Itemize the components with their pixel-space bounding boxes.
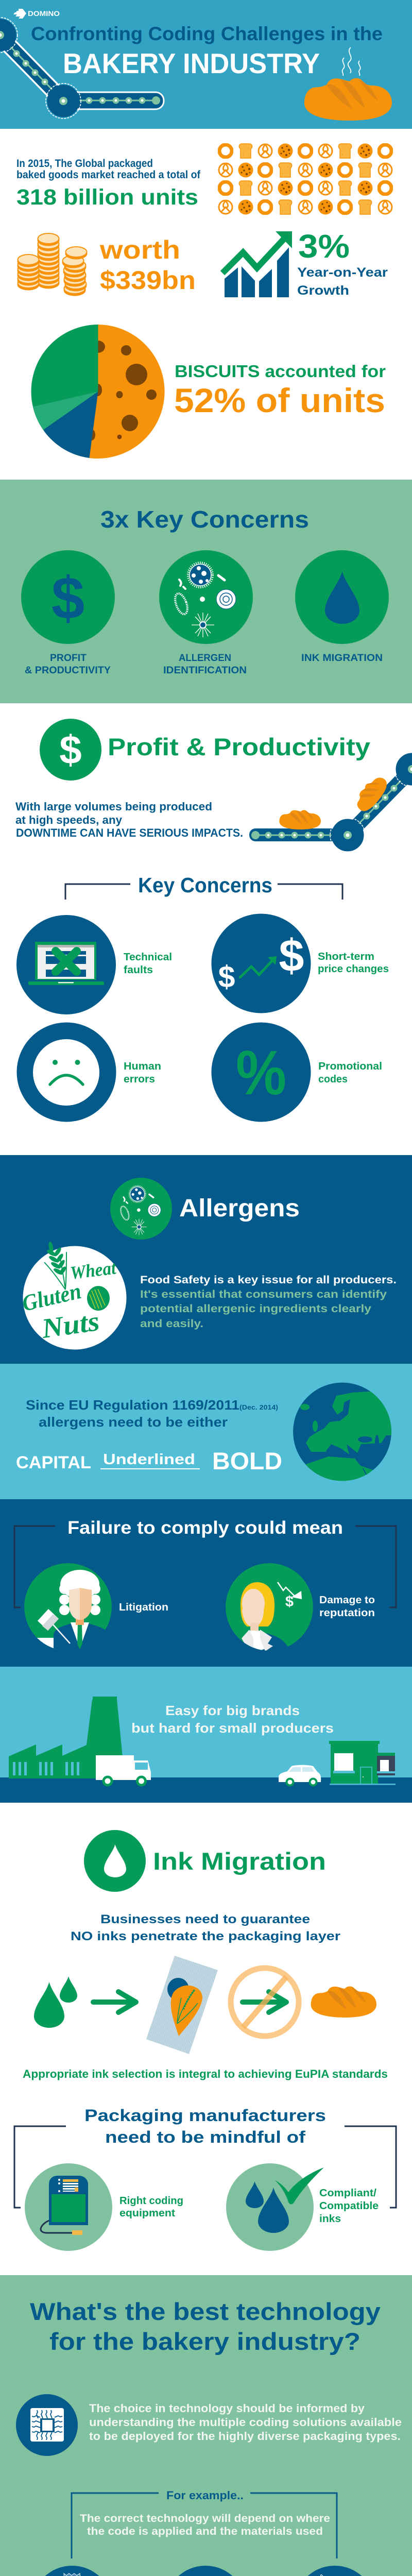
heading xyxy=(30,2298,381,2355)
heading: Ink Migration xyxy=(153,1848,326,1875)
icon: prohibited arrow xyxy=(231,1968,299,2036)
stat: 318 billion units: 318 billion units xyxy=(16,185,198,210)
label: promotional codes: codes xyxy=(318,1074,348,1085)
label: year on year growth: Year-on-Year xyxy=(297,265,388,280)
panel: EU regulation xyxy=(0,1364,412,1499)
heading: Profit & Productivity xyxy=(108,733,370,760)
icon: human errors face xyxy=(16,1022,116,1122)
icon: bread xyxy=(311,1987,376,2018)
label: allergen identification: ALLERGEN xyxy=(179,653,231,664)
label: price changes: price changes xyxy=(318,963,389,975)
label: profit and productivity xyxy=(25,653,111,676)
panel: failure to comply xyxy=(0,1499,412,1667)
panel: profit and productivity xyxy=(15,719,412,1122)
text: easy for big brands: Easy for big brands xyxy=(165,1703,300,1718)
text: bold: BOLD xyxy=(212,1447,282,1475)
label: right coding equipment: Right coding xyxy=(119,2195,183,2207)
chart: growth xyxy=(222,231,292,297)
icon: businesswoman: $ xyxy=(285,1594,294,1610)
icon: wheat gluten nuts: Nuts xyxy=(39,1306,101,1344)
label: human errors: errors xyxy=(124,1074,155,1085)
icon: snack bar box xyxy=(165,2566,246,2576)
text: guarantee xyxy=(71,1912,341,1943)
text: correct technology xyxy=(80,2513,330,2537)
text: downtime xyxy=(15,800,243,839)
icon: ink drop badge xyxy=(84,1830,146,1892)
text: food safety: and easily. xyxy=(140,1317,203,1330)
icon: ink drops xyxy=(34,1976,77,2028)
panel: best technology xyxy=(0,2275,412,2576)
road xyxy=(0,1777,412,1803)
decorative bracket with heading: For example.. xyxy=(166,2489,244,2502)
text: downtime: at high speeds, any xyxy=(15,814,123,826)
label: human errors: Human xyxy=(124,1061,161,1072)
decorative bracket with heading: Packaging manufacturers xyxy=(84,2106,326,2125)
text: food safety: Food Safety is a key issue for all producers. xyxy=(140,1274,397,1286)
heading: What's the best technology xyxy=(30,2298,381,2325)
text: food safety xyxy=(140,1274,397,1330)
stat: $339bn: $339bn xyxy=(100,266,196,295)
text: biscuits accounted for: BISCUITS accounted for xyxy=(175,362,386,381)
icon: factory xyxy=(9,1697,126,1778)
decorative bracket with heading xyxy=(14,1518,396,1607)
panel: header xyxy=(0,0,412,129)
text: food safety: It's essential that consumers can identify xyxy=(140,1288,387,1300)
panel: big brands and small producers xyxy=(0,1667,412,1803)
decorative bracket with heading xyxy=(72,2489,337,2558)
icon: allergens badge xyxy=(110,1178,172,1240)
text: capital: CAPITAL xyxy=(16,1453,91,1472)
title line 2: BAKERY INDUSTRY xyxy=(63,47,320,79)
heading: key concerns with bracket: Key Concerns xyxy=(138,873,272,897)
heading: Allergens xyxy=(179,1195,300,1222)
label: price changes xyxy=(318,951,389,975)
label: compliant inks: Compliant/ xyxy=(319,2188,376,2199)
icon: ink drop xyxy=(295,550,389,644)
label: technical faults: faults xyxy=(124,964,153,976)
label: profit and productivity: PROFIT xyxy=(50,653,87,664)
label: damage to reputation: Damage to xyxy=(319,1595,375,1606)
icon: price changes: $ xyxy=(279,930,304,981)
label: promotional codes xyxy=(318,1061,382,1085)
icon: percent xyxy=(211,1022,311,1122)
text: underlined: Underlined xyxy=(103,1451,195,1468)
icon: technical faults laptop xyxy=(16,915,116,1014)
stat: 52% of units: 52% of units xyxy=(174,381,385,419)
icon: bread tag xyxy=(294,2566,375,2576)
text: regulation xyxy=(26,1397,278,1430)
icon: conveyor belt xyxy=(0,18,164,118)
icon: wheat gluten nuts: Gluten xyxy=(20,1278,83,1316)
stat: worth: worth xyxy=(99,235,180,264)
icon: price changes: $ xyxy=(218,960,235,994)
panel: 3x key concerns xyxy=(0,480,412,703)
label: profit and productivity: & PRODUCTIVITY xyxy=(25,665,111,676)
text: guarantee: NO inks penetrate the packaging layer xyxy=(71,1929,341,1943)
label: technical faults xyxy=(124,952,172,976)
title line 1: Confronting Coding Challenges in the xyxy=(31,23,383,44)
decorative bracket with heading: Failure to comply could mean xyxy=(67,1518,343,1538)
label: litigation: Litigation xyxy=(119,1602,168,1613)
icon: dollar xyxy=(21,550,115,644)
text: market intro: In 2015, The Global packaged xyxy=(16,158,153,170)
icon: dollar: $ xyxy=(52,565,84,632)
icon: bread loaf xyxy=(304,78,392,121)
text: correct technology: the code is applied and the materials used xyxy=(87,2526,323,2537)
panel: packaging manufacturers xyxy=(14,2106,396,2251)
text: regulation: allergens need to be either xyxy=(39,1414,228,1430)
icon: dollar badge: $ xyxy=(59,727,82,772)
label: year on year growth: Growth xyxy=(297,283,349,298)
stat: 3%: 3% xyxy=(298,228,350,265)
text: market intro: baked goods market reached a total of xyxy=(16,169,201,181)
label: human errors xyxy=(124,1061,161,1085)
chart: cookie pie xyxy=(31,325,165,459)
icon: car xyxy=(279,1765,321,1786)
label: technical faults: Technical xyxy=(124,952,172,963)
text: technology choice: understanding the multiple coding solutions available xyxy=(89,2416,402,2429)
icon: dollar badge xyxy=(40,719,101,781)
icon: percent: % xyxy=(236,1038,286,1108)
arrow xyxy=(93,1992,136,2012)
text: easy for big brands: but hard for small producers xyxy=(131,1720,334,1736)
icon: globe europe xyxy=(293,1383,391,1481)
icon: bread bag xyxy=(31,2566,113,2576)
text: EuPIA standards: Appropriate ink selection is integral to achieving EuPIA standards xyxy=(23,2067,388,2080)
icon: price changes xyxy=(211,914,311,1013)
panel: allergens xyxy=(0,1155,412,1364)
icon: judge xyxy=(24,1563,112,1654)
text: technology choice: The choice in technology should be informed by xyxy=(89,2402,365,2415)
decorative bracket with heading: need to be mindful of xyxy=(105,2128,305,2146)
label: damage to reputation: reputation xyxy=(319,1607,375,1619)
text: regulation: (Dec. 2014) xyxy=(239,1403,278,1411)
decorative bracket with heading xyxy=(14,2106,396,2208)
label: promotional codes: Promotional xyxy=(318,1061,382,1072)
icon: conveyor with bread xyxy=(249,752,412,853)
text: correct technology: The correct technology will depend on where xyxy=(80,2513,330,2524)
panel: biscuits share xyxy=(21,325,386,464)
icon: compliant inks xyxy=(226,2163,324,2251)
label: compliant inks xyxy=(319,2188,379,2225)
icon: coin stacks xyxy=(18,233,88,296)
text: technology choice: to be deployed for the highly diverse packaging types. xyxy=(89,2430,401,2443)
text: guarantee: Businesses need to guarantee xyxy=(100,1912,310,1926)
label: price changes: Short-term xyxy=(318,951,374,962)
icon: wheat gluten nuts xyxy=(20,1241,126,1350)
label: right coding equipment: equipment xyxy=(119,2208,175,2219)
label: damage to reputation xyxy=(319,1595,375,1619)
label: allergen identification xyxy=(163,653,247,676)
text: food safety: potential allergenic ingredients clearly xyxy=(140,1302,371,1315)
icon: allergens xyxy=(159,550,253,644)
heading: 3x Key Concerns xyxy=(100,506,309,533)
text: market intro xyxy=(16,158,201,181)
logo: Domino: DOMINO xyxy=(28,10,60,18)
heading: for the bakery industry? xyxy=(49,2328,360,2355)
label: compliant inks: inks xyxy=(319,2213,341,2225)
icon: businesswoman xyxy=(226,1563,313,1659)
icon: truck xyxy=(96,1755,151,1785)
text: technology choice xyxy=(89,2402,402,2443)
icon: microchip xyxy=(16,2394,78,2456)
label: right coding equipment xyxy=(119,2195,183,2219)
icon: steam xyxy=(342,47,360,76)
text: easy for big brands xyxy=(131,1703,334,1736)
panel: market size xyxy=(16,143,392,298)
icon: wheat gluten nuts: Wheat xyxy=(69,1257,117,1283)
label: compliant inks: Compatible xyxy=(319,2200,379,2212)
label: year on year growth xyxy=(297,265,388,298)
label: ink migration: INK MIGRATION xyxy=(301,653,383,664)
label: allergen identification: IDENTIFICATION xyxy=(163,665,247,676)
panel: ink migration xyxy=(23,1830,388,2080)
logo: Domino xyxy=(13,9,60,19)
icon: coding machine xyxy=(25,2163,112,2251)
text: regulation: Since EU Regulation 1169/2011 xyxy=(26,1397,239,1413)
icon grid: baked goods xyxy=(219,143,392,214)
text: downtime: DOWNTIME CAN HAVE SERIOUS IMPACTS. xyxy=(16,826,243,839)
icon: small shop xyxy=(329,1741,396,1785)
text: downtime: With large volumes being produced xyxy=(15,800,212,813)
icon: packaging layer xyxy=(146,1956,218,2054)
heading: key concerns with bracket xyxy=(65,873,342,900)
